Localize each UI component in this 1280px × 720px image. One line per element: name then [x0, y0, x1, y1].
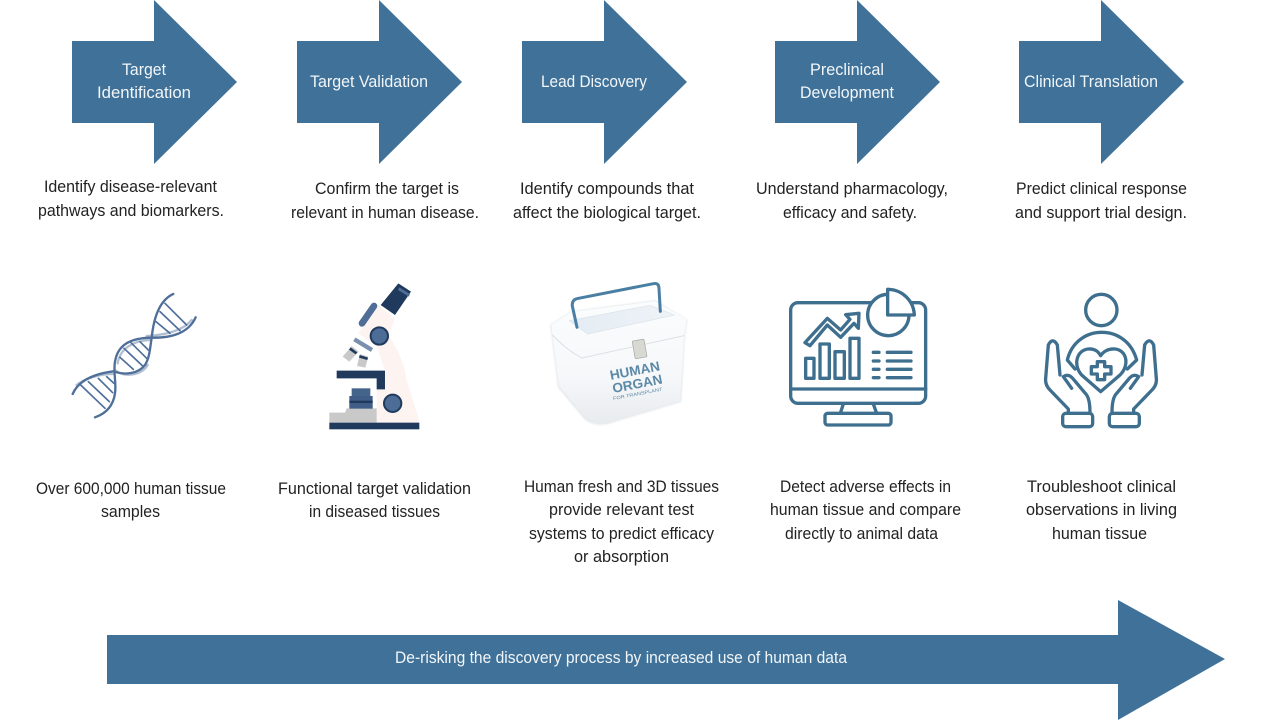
arrow: Preclinical Development: Preclinical [810, 61, 884, 79]
text: lead discovery description: Identify compounds that [520, 180, 694, 198]
text: tissue samples caption [36, 480, 226, 521]
text: adverse effects caption [770, 478, 961, 543]
text: clinical observations caption: observations in living [1026, 501, 1177, 519]
text: adverse effects caption: Detect adverse effects in [780, 478, 951, 496]
arrow: Lead Discovery [522, 0, 687, 164]
arrow: Preclinical Development: Development [800, 84, 894, 102]
text: clinical observations caption: human tissue [1052, 525, 1147, 543]
icon: monitor with charts [791, 289, 926, 425]
text: clinical observations caption: Troubleshoot clinical [1027, 478, 1176, 496]
text: target identification description [38, 178, 224, 220]
icon: hands holding person with heart [1046, 294, 1156, 427]
text: fresh and 3D tissues caption: systems to predict efficacy [529, 525, 715, 543]
text: fresh and 3D tissues caption: Human fresh and 3D tissues [524, 478, 719, 496]
arrow: Clinical Translation [1019, 0, 1184, 164]
icon: human organ transport box: HUMAN [609, 358, 661, 383]
text: preclinical description: efficacy and safety. [783, 204, 917, 222]
text: target validation caption [278, 480, 471, 521]
text: target identification description: Identify disease-relevant [44, 178, 217, 196]
text: lead discovery description: affect the biological target. [513, 204, 701, 222]
text: target validation caption: in diseased tissues [309, 503, 440, 521]
text: preclinical description: Understand pharmacology, [756, 180, 948, 198]
text: target identification description: pathways and biomarkers. [38, 202, 224, 220]
text: target validation description: Confirm the target is [315, 180, 459, 198]
arrow: Target Identification [72, 0, 237, 164]
text: tissue samples caption: Over 600,000 human tissue [36, 480, 226, 498]
arrow: Lead Discovery: Lead Discovery [541, 73, 648, 91]
icon: human organ transport box: FOR TRANSPLANT [613, 387, 663, 401]
arrow: Target Identification: Identification [97, 84, 191, 102]
icon: human organ transport box [550, 284, 687, 424]
text: tissue samples caption: samples [101, 503, 160, 521]
text: fresh and 3D tissues caption: or absorption [574, 548, 669, 566]
arrow: Target Validation: Target Validation [310, 73, 428, 91]
text: target validation description: relevant in human disease. [291, 204, 479, 222]
text: target validation caption: Functional target validation [278, 480, 471, 498]
icon: DNA helix [73, 294, 196, 417]
text: clinical observations caption [1026, 478, 1177, 543]
icon: human organ transport box: ORGAN [611, 372, 664, 396]
arrow: de-risking banner [107, 600, 1225, 720]
arrow: Target Validation [297, 0, 462, 164]
text: clinical translation description: Predict clinical response [1016, 180, 1187, 198]
text: fresh and 3D tissues caption [524, 478, 719, 566]
text: lead discovery description [513, 180, 701, 222]
text: adverse effects caption: human tissue and compare [770, 501, 961, 519]
icon: microscope [329, 283, 420, 429]
text: clinical translation description: and support trial design. [1015, 204, 1187, 222]
text: preclinical description [756, 180, 948, 222]
arrow: Preclinical Development [775, 0, 940, 164]
arrow: Clinical Translation: Clinical Translation [1024, 73, 1158, 91]
arrow: Target Identification: Target [122, 61, 166, 79]
text: fresh and 3D tissues caption: provide relevant test [549, 501, 694, 519]
text: target validation description [291, 180, 479, 222]
text: adverse effects caption: directly to animal data [785, 525, 939, 543]
text: clinical translation description [1015, 180, 1187, 222]
arrow: de-risking banner: De-risking the discovery process by increased use of human data [395, 649, 848, 667]
